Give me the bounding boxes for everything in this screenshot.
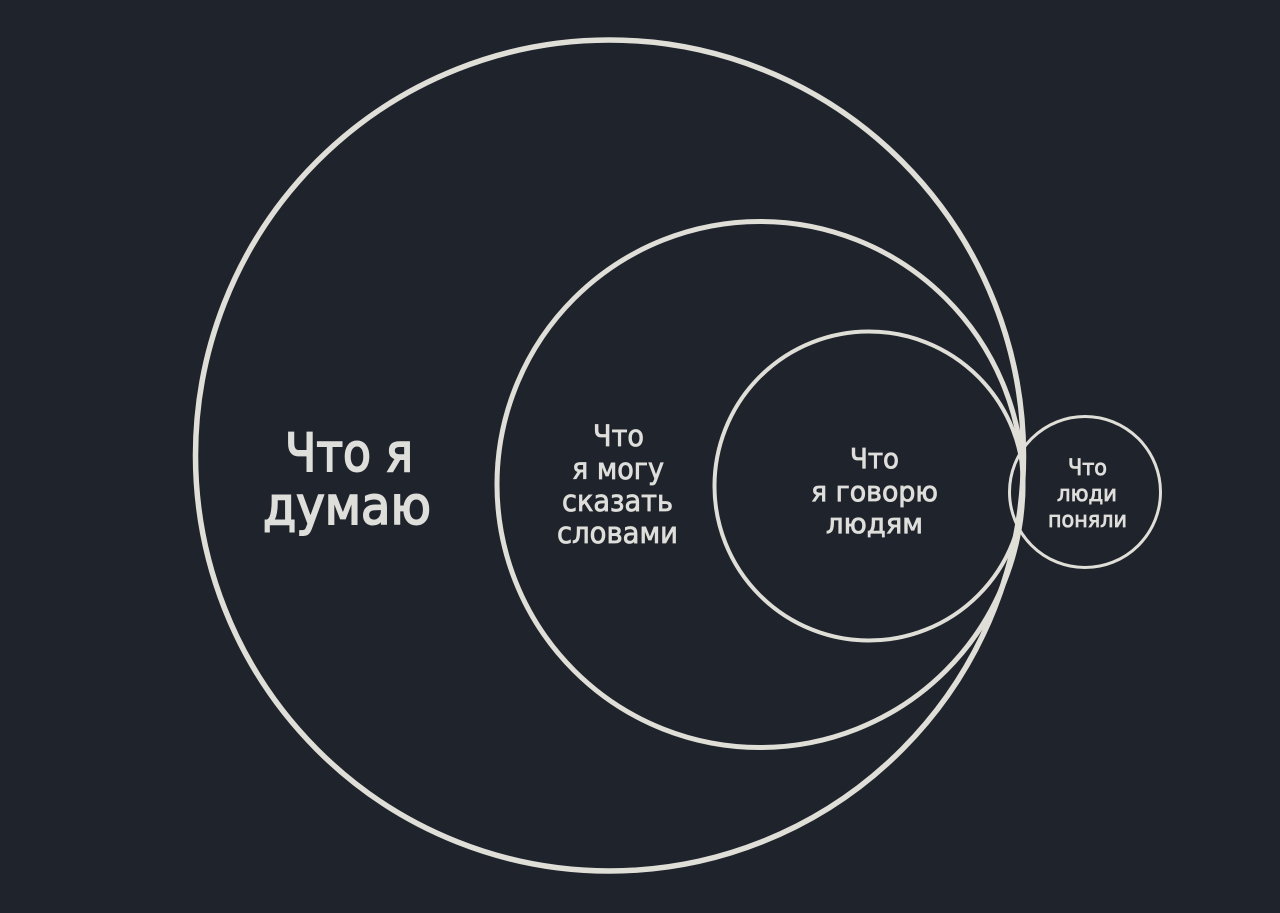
label: what I can put into words: сказать — [562, 484, 673, 518]
label: what I tell people: я говорю — [811, 475, 938, 508]
label: what I think: думаю — [263, 476, 431, 537]
circle: what I think — [196, 40, 1024, 871]
label: what I can put into words: словами — [557, 516, 678, 550]
label: what I think: Что я — [285, 423, 413, 484]
label: what people understood: поняли — [1048, 508, 1127, 533]
label: what people understood: люди — [1057, 482, 1117, 507]
circle: what people understood — [1010, 416, 1160, 568]
label: what I tell people: людям — [826, 507, 923, 540]
label: what I tell people — [811, 442, 938, 540]
label: what people understood: Что — [1068, 456, 1107, 481]
label: what I can put into words: Что — [593, 419, 644, 453]
circle: what I tell people — [714, 332, 1024, 640]
label: what people understood — [1048, 456, 1127, 533]
circle: what I can put into words — [497, 222, 1023, 748]
label: what I tell people: Что — [850, 442, 899, 475]
label: what I can put into words: я могу — [572, 452, 664, 486]
label: what I can put into words — [557, 419, 678, 550]
label: what I think — [263, 423, 431, 537]
